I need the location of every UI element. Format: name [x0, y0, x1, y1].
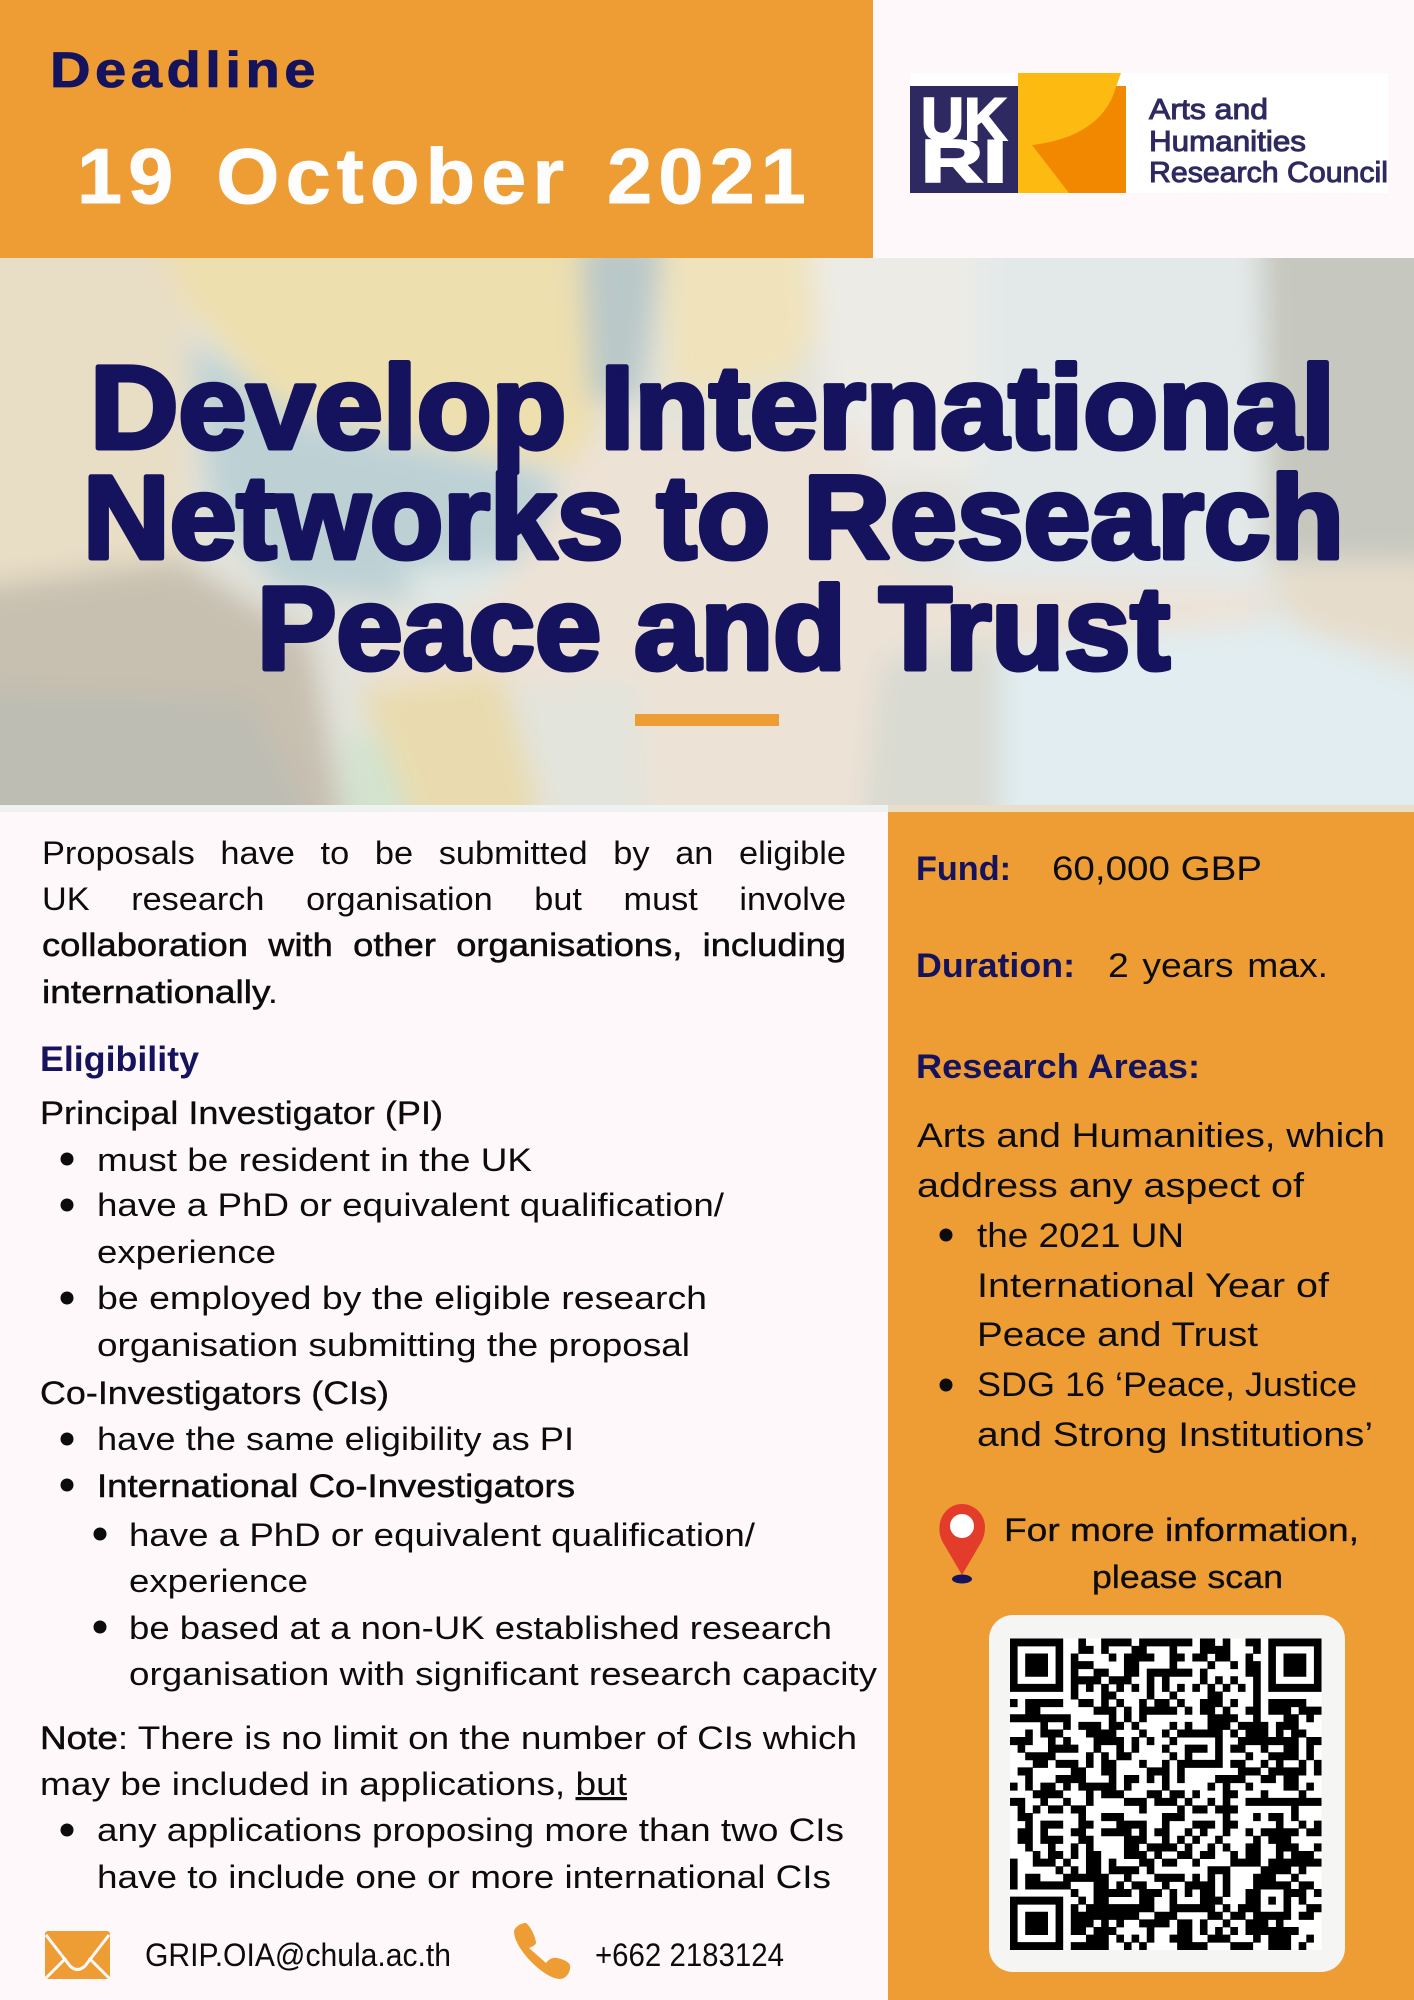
panel: note: Note : There is no limit on the number of CIs which	[40, 1720, 857, 1756]
research areas text: Peace and Trust	[977, 1316, 1259, 1354]
research areas text: SDG 16 ‘Peace, Justice	[977, 1366, 1357, 1404]
icon: envelope	[45, 1931, 110, 1979]
title: Develop International	[90, 342, 1335, 474]
fund: 60,000 GBP	[1052, 850, 1262, 888]
contact: email: GRIP.OIA@chula.ac.th	[145, 1937, 451, 1973]
panel: intro paragraph	[42, 835, 846, 1010]
list: co-investigator requirements: have a PhD or equivalent qualification/	[129, 1517, 755, 1553]
panel: eligibility	[40, 1040, 877, 1692]
research areas text	[917, 1117, 1385, 1454]
list: co-investigator requirements: organisation with significant research capacity	[129, 1656, 877, 1692]
panel: intro paragraph: UK research organisation but must involve	[42, 881, 846, 917]
research areas text: the 2021 UN	[977, 1217, 1184, 1255]
panel: deadline header	[0, 0, 873, 258]
title	[83, 342, 1344, 695]
research areas text: International Year of	[977, 1267, 1330, 1305]
call to scan	[1004, 1512, 1359, 1595]
title: Networks to Research	[83, 452, 1344, 584]
list: co-investigator requirements: International Co-Investigators	[97, 1468, 575, 1504]
panel: note	[40, 1720, 857, 1895]
deadline label: Deadline	[50, 42, 320, 98]
research areas text: address any aspect of	[917, 1167, 1305, 1205]
QR code card	[989, 1615, 1345, 1972]
subheading: co-investigators: Co-Investigators (CIs)	[40, 1375, 389, 1411]
panel: funding details sidebar	[888, 812, 1414, 2000]
fund: Fund:	[916, 850, 1011, 888]
duration: 2 years max.	[1108, 947, 1328, 985]
list: principal investigator requirements: be employed by the eligible research	[97, 1280, 707, 1316]
panel: intro paragraph: internationally .	[42, 974, 278, 1010]
call to scan: For more information,	[1004, 1512, 1359, 1548]
panel: intro paragraph: collaboration with other organisations, including	[42, 927, 846, 963]
research areas text: and Strong Institutions’	[977, 1416, 1373, 1454]
panel: note: any applications proposing more than two CIs	[97, 1812, 844, 1848]
list: co-investigator requirements	[60, 1421, 877, 1692]
list: principal investigator requirements: experience	[97, 1234, 276, 1270]
logo: UKRI Arts and Humanities Research Council: UK	[921, 86, 1007, 153]
list: principal investigator requirements: have a PhD or equivalent qualification/	[97, 1187, 724, 1223]
list: principal investigator requirements	[60, 1142, 724, 1363]
logo: UKRI Arts and Humanities Research Council: RI	[921, 128, 1007, 195]
panel: intro paragraph: Proposals have to be submitted by an eligible	[42, 835, 846, 871]
logo: UKRI Arts and Humanities Research Council: Arts and	[1149, 94, 1268, 126]
heading: eligibility: Eligibility	[40, 1040, 200, 1079]
icon: phone handset	[514, 1923, 570, 1979]
research areas heading: Research Areas:	[916, 1048, 1200, 1086]
deadline date: 19 October 2021	[77, 132, 812, 220]
icon: location pin	[939, 1504, 985, 1584]
logo: UKRI Arts and Humanities Research Council: Research Council	[1149, 157, 1388, 189]
subheading: principal investigator: Principal Investigator (PI)	[40, 1095, 443, 1131]
duration: Duration:	[916, 947, 1075, 985]
logo: UKRI Arts and Humanities Research Council: Humanities	[1149, 126, 1306, 158]
title: Peace and Trust	[257, 563, 1170, 695]
contact: phone	[514, 1923, 784, 1979]
panel: note: have to include one or more international CIs	[97, 1859, 831, 1895]
list: principal investigator requirements: must be resident in the UK	[97, 1142, 532, 1178]
panel: hero photo of joined hands	[0, 258, 1414, 805]
list: co-investigator requirements: experience	[129, 1563, 308, 1599]
panel: note: may be included in applications, but	[40, 1766, 627, 1802]
title accent bar	[635, 714, 779, 726]
research areas text: Arts and Humanities, which	[917, 1117, 1385, 1155]
duration	[916, 947, 1328, 985]
logo: UKRI Arts and Humanities Research Council	[910, 73, 1388, 195]
list: co-investigator requirements: have the same eligibility as PI	[97, 1421, 574, 1457]
list: principal investigator requirements: organisation submitting the proposal	[97, 1327, 690, 1363]
list: co-investigator requirements: be based at a non-UK established research	[129, 1610, 832, 1646]
call to scan: please scan	[1092, 1559, 1283, 1595]
fund	[916, 850, 1262, 888]
contact: phone: +662 2183124	[595, 1937, 784, 1973]
contact: email	[45, 1931, 451, 1979]
